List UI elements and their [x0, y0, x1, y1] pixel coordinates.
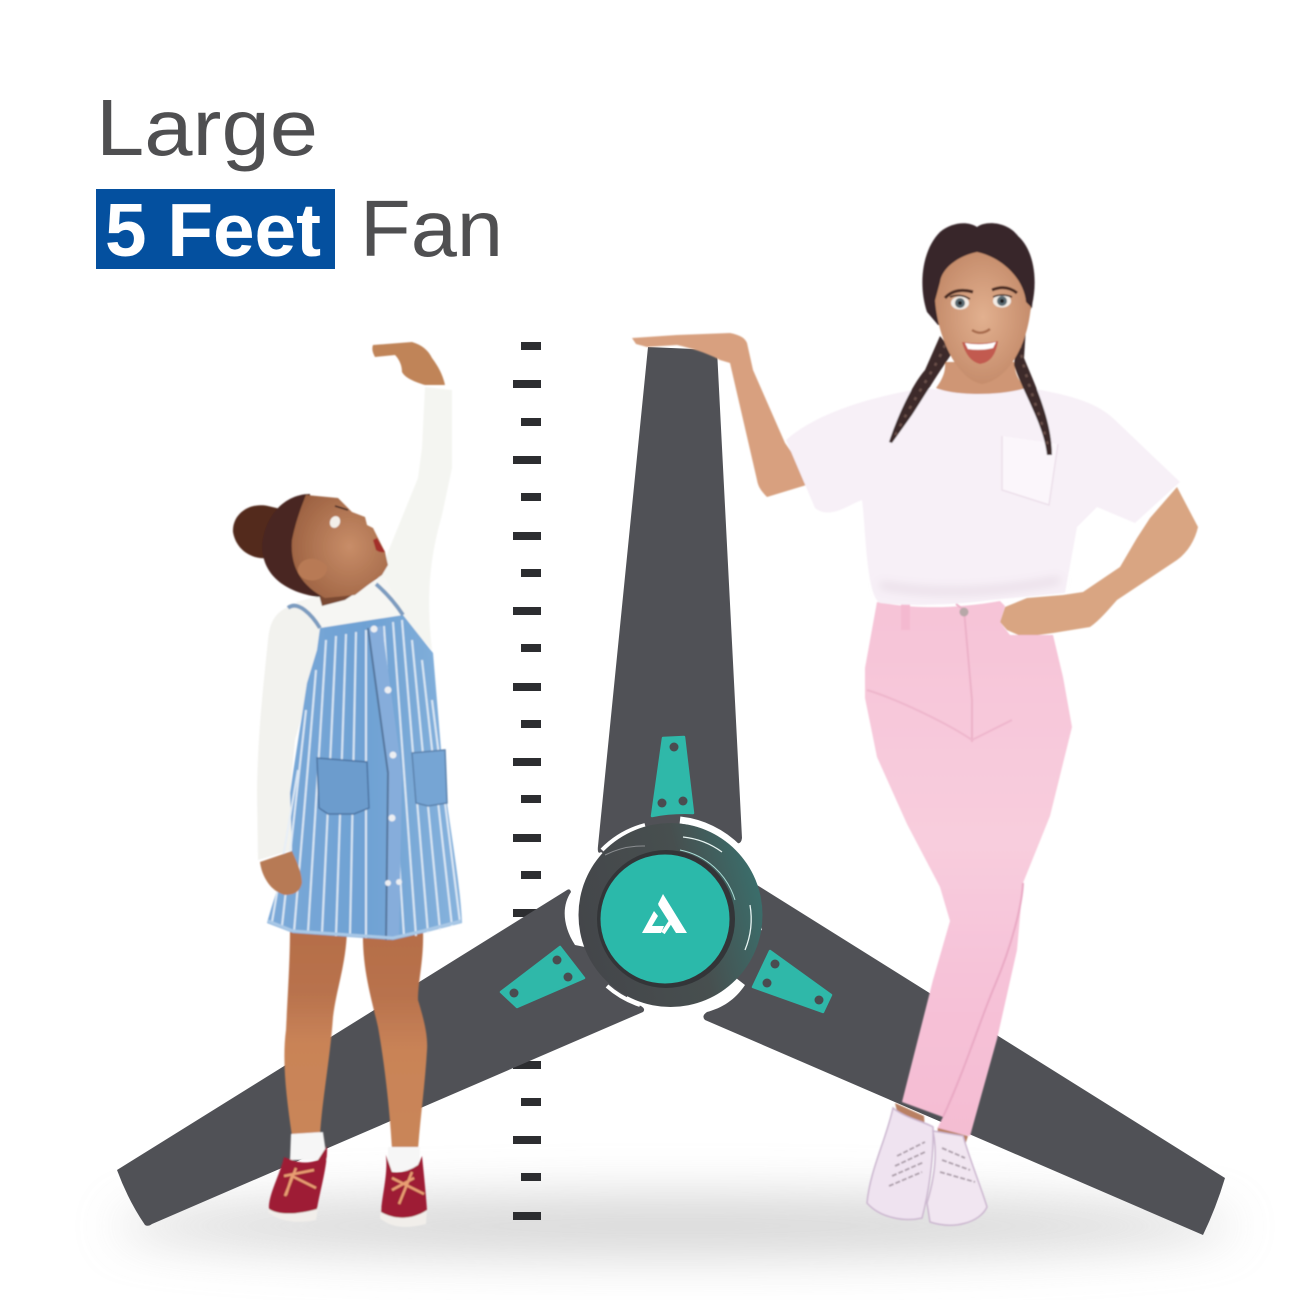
- highlight box: 5 Feet: 5 Feet: [105, 188, 321, 272]
- t-shirt soft folds: [880, 580, 1060, 591]
- woman: shoes: [867, 1108, 987, 1225]
- woman figure: [632, 223, 1198, 1225]
- girl: socks: [290, 1132, 420, 1172]
- jeans knee fold: [943, 883, 1023, 1117]
- hub teal cap: [600, 854, 730, 984]
- dress stripes: [272, 620, 460, 938]
- heading: Large: Large: [96, 83, 318, 172]
- ceiling fan: [117, 347, 1225, 1235]
- blade bracket: left: [501, 947, 584, 1007]
- girl: face: [292, 495, 388, 598]
- jeans crotch and fly: [956, 604, 972, 742]
- woman: neck: [936, 362, 1026, 394]
- motor hub: [578, 823, 762, 1007]
- girl: neck: [315, 575, 378, 606]
- fan blade: top: [598, 347, 742, 900]
- jeans button: [960, 608, 968, 616]
- woman: right braid: [1014, 327, 1052, 455]
- girl: left shoe: [268, 1146, 327, 1222]
- woman: nose: [972, 329, 990, 333]
- woman: left arm and hand on blade: [632, 333, 813, 497]
- girl: hair and bun: [233, 494, 345, 597]
- woman: pink jeans: [865, 601, 1072, 1136]
- dress hem: [268, 921, 461, 938]
- girl: collar: [296, 578, 404, 630]
- girl: right shoe: [380, 1155, 427, 1227]
- woman: left braid: [889, 336, 953, 443]
- woman: hair: [922, 223, 1035, 325]
- girl: raised sleeve: [375, 387, 452, 650]
- girl: body sleeve: [257, 604, 330, 860]
- girl: eye and mouth: [328, 506, 385, 552]
- woman: mouth: [962, 341, 998, 364]
- floor shadow: [115, 1196, 1235, 1256]
- woman: eyes and brows: [945, 288, 1017, 310]
- jeans belt loop: [901, 604, 910, 630]
- fan blade: right: [700, 885, 1225, 1235]
- dress placket with buttons: [368, 626, 402, 940]
- woman: face: [935, 250, 1031, 384]
- fan blade: left: [117, 889, 650, 1226]
- girl: ear: [298, 559, 327, 580]
- woman: right arm and hand on hip: [1000, 487, 1198, 637]
- dress straps: [288, 584, 403, 628]
- heading: Fan: Fan: [360, 184, 503, 273]
- blade bracket: top: [652, 737, 693, 816]
- t-shirt pocket: [1002, 436, 1058, 505]
- girl: legs: [284, 930, 427, 1150]
- girl: denim dress: [267, 584, 462, 940]
- girl: fist: [260, 851, 302, 895]
- dress pockets: [317, 758, 369, 814]
- brand logo: [642, 894, 687, 933]
- hub clearance gaps: [602, 820, 738, 1008]
- blade bracket: right: [753, 951, 831, 1012]
- woman: white t-shirt: [786, 388, 1180, 605]
- woman: ankles: [895, 1103, 968, 1145]
- girl figure: [233, 342, 462, 1227]
- woman: hairline: [930, 232, 1032, 312]
- title: [96, 83, 503, 273]
- height ruler ticks: [513, 342, 541, 1220]
- girl: raised hand: [372, 342, 445, 385]
